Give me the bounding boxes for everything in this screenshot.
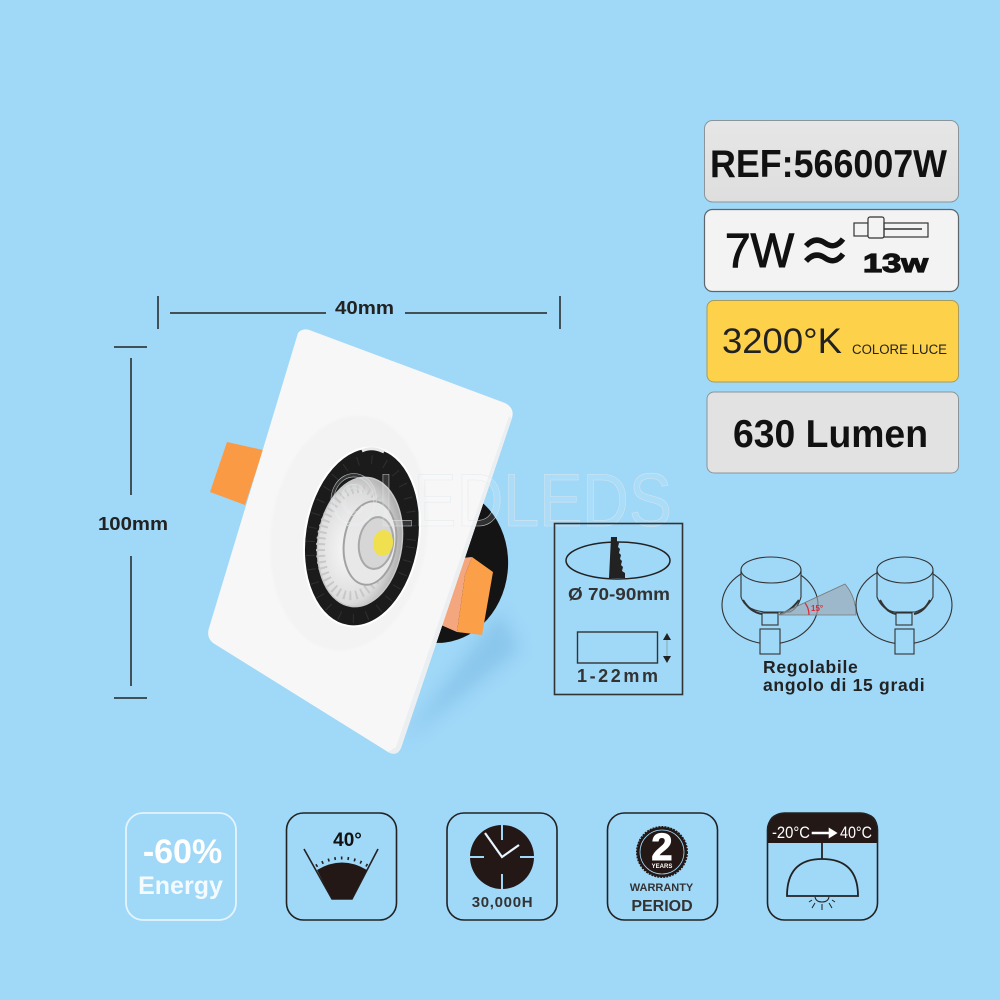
spec box: colour temperature: 3200°K (722, 322, 842, 361)
installation panel: cut-out and depth: 1-22mm (577, 666, 658, 686)
icon: CFL bulb (854, 217, 928, 238)
product photo: square LED downlight (208, 329, 520, 754)
spec box: reference: REF:566007W (710, 143, 947, 186)
feature icon: energy saving: -60% (143, 833, 222, 871)
white square plate (208, 329, 513, 754)
tilt wedge (778, 584, 856, 615)
caption: adjustable angle: Regolabile (763, 657, 858, 677)
left lamp (722, 557, 818, 654)
reflector ribs (314, 484, 396, 600)
feature icon: operating temperature: 40°C (840, 823, 872, 842)
raised dome on plate (255, 405, 443, 661)
feature icon: beam angle: 40° (333, 830, 362, 851)
arrow (812, 828, 837, 838)
feature icon: warranty (608, 813, 718, 920)
feature icon: warranty: PERIOD (631, 898, 693, 915)
feature icon: operating temperature: -20°C (772, 823, 810, 842)
right orange clip (441, 557, 493, 635)
feature icon: warranty: 2 (651, 827, 673, 869)
installation panel: cut-out and depth (554, 524, 682, 694)
shadow under lamp (400, 610, 520, 745)
feature icon: energy saving (126, 813, 236, 920)
feature icon: beam angle (286, 813, 396, 920)
spec box: wattage equivalent: 13w (863, 248, 929, 278)
yellow COB chip (371, 529, 395, 557)
feature icon: operating temperature (768, 813, 878, 920)
feature icon: energy saving: Energy (138, 872, 223, 900)
rear housing (364, 480, 516, 650)
approx symbol (806, 239, 843, 261)
spec box: colour temperature: COLORE LUCE (852, 342, 947, 357)
feature icon: lifetime clock: 30,000H (472, 894, 533, 911)
spec box: lumen: 630 Lumen (733, 413, 928, 456)
black ring (292, 439, 432, 635)
15 degree arc (805, 603, 809, 615)
reflector rings (338, 498, 402, 588)
icon: hole saw (566, 537, 670, 579)
spec box: wattage equivalent: 7W (725, 225, 795, 278)
dimension: width 40mm: 40mm (335, 298, 394, 318)
diagram: adjustable 15 degree angle (722, 557, 952, 654)
spec box: lumen (707, 392, 958, 473)
lamp shade (787, 843, 858, 910)
ring ribs (299, 452, 423, 626)
spec box: wattage equivalent (704, 210, 958, 292)
spec box: reference (704, 120, 958, 202)
left orange clip (210, 442, 263, 505)
silver reflector (309, 472, 411, 612)
spec box: colour temperature (707, 300, 958, 382)
installation panel: cut-out and depth: Ø 70-90mm (568, 584, 670, 604)
feature icon: warranty: YEARS (652, 864, 672, 870)
feature icon: lifetime clock (447, 813, 557, 920)
caption: adjustable angle: angolo di 15 gradi (763, 675, 925, 695)
chrome highlight on ring (362, 449, 384, 452)
right lamp (856, 557, 952, 654)
dimension: height 100mm: 100mm (98, 514, 168, 534)
icon: depth arrows (663, 633, 671, 663)
diagram: adjustable 15 degree angle: 15° (811, 604, 823, 613)
watermark: ©LEDLEDS (330, 458, 672, 542)
plate edge shading (388, 416, 512, 754)
feature icon: warranty: WARRANTY (630, 882, 694, 894)
